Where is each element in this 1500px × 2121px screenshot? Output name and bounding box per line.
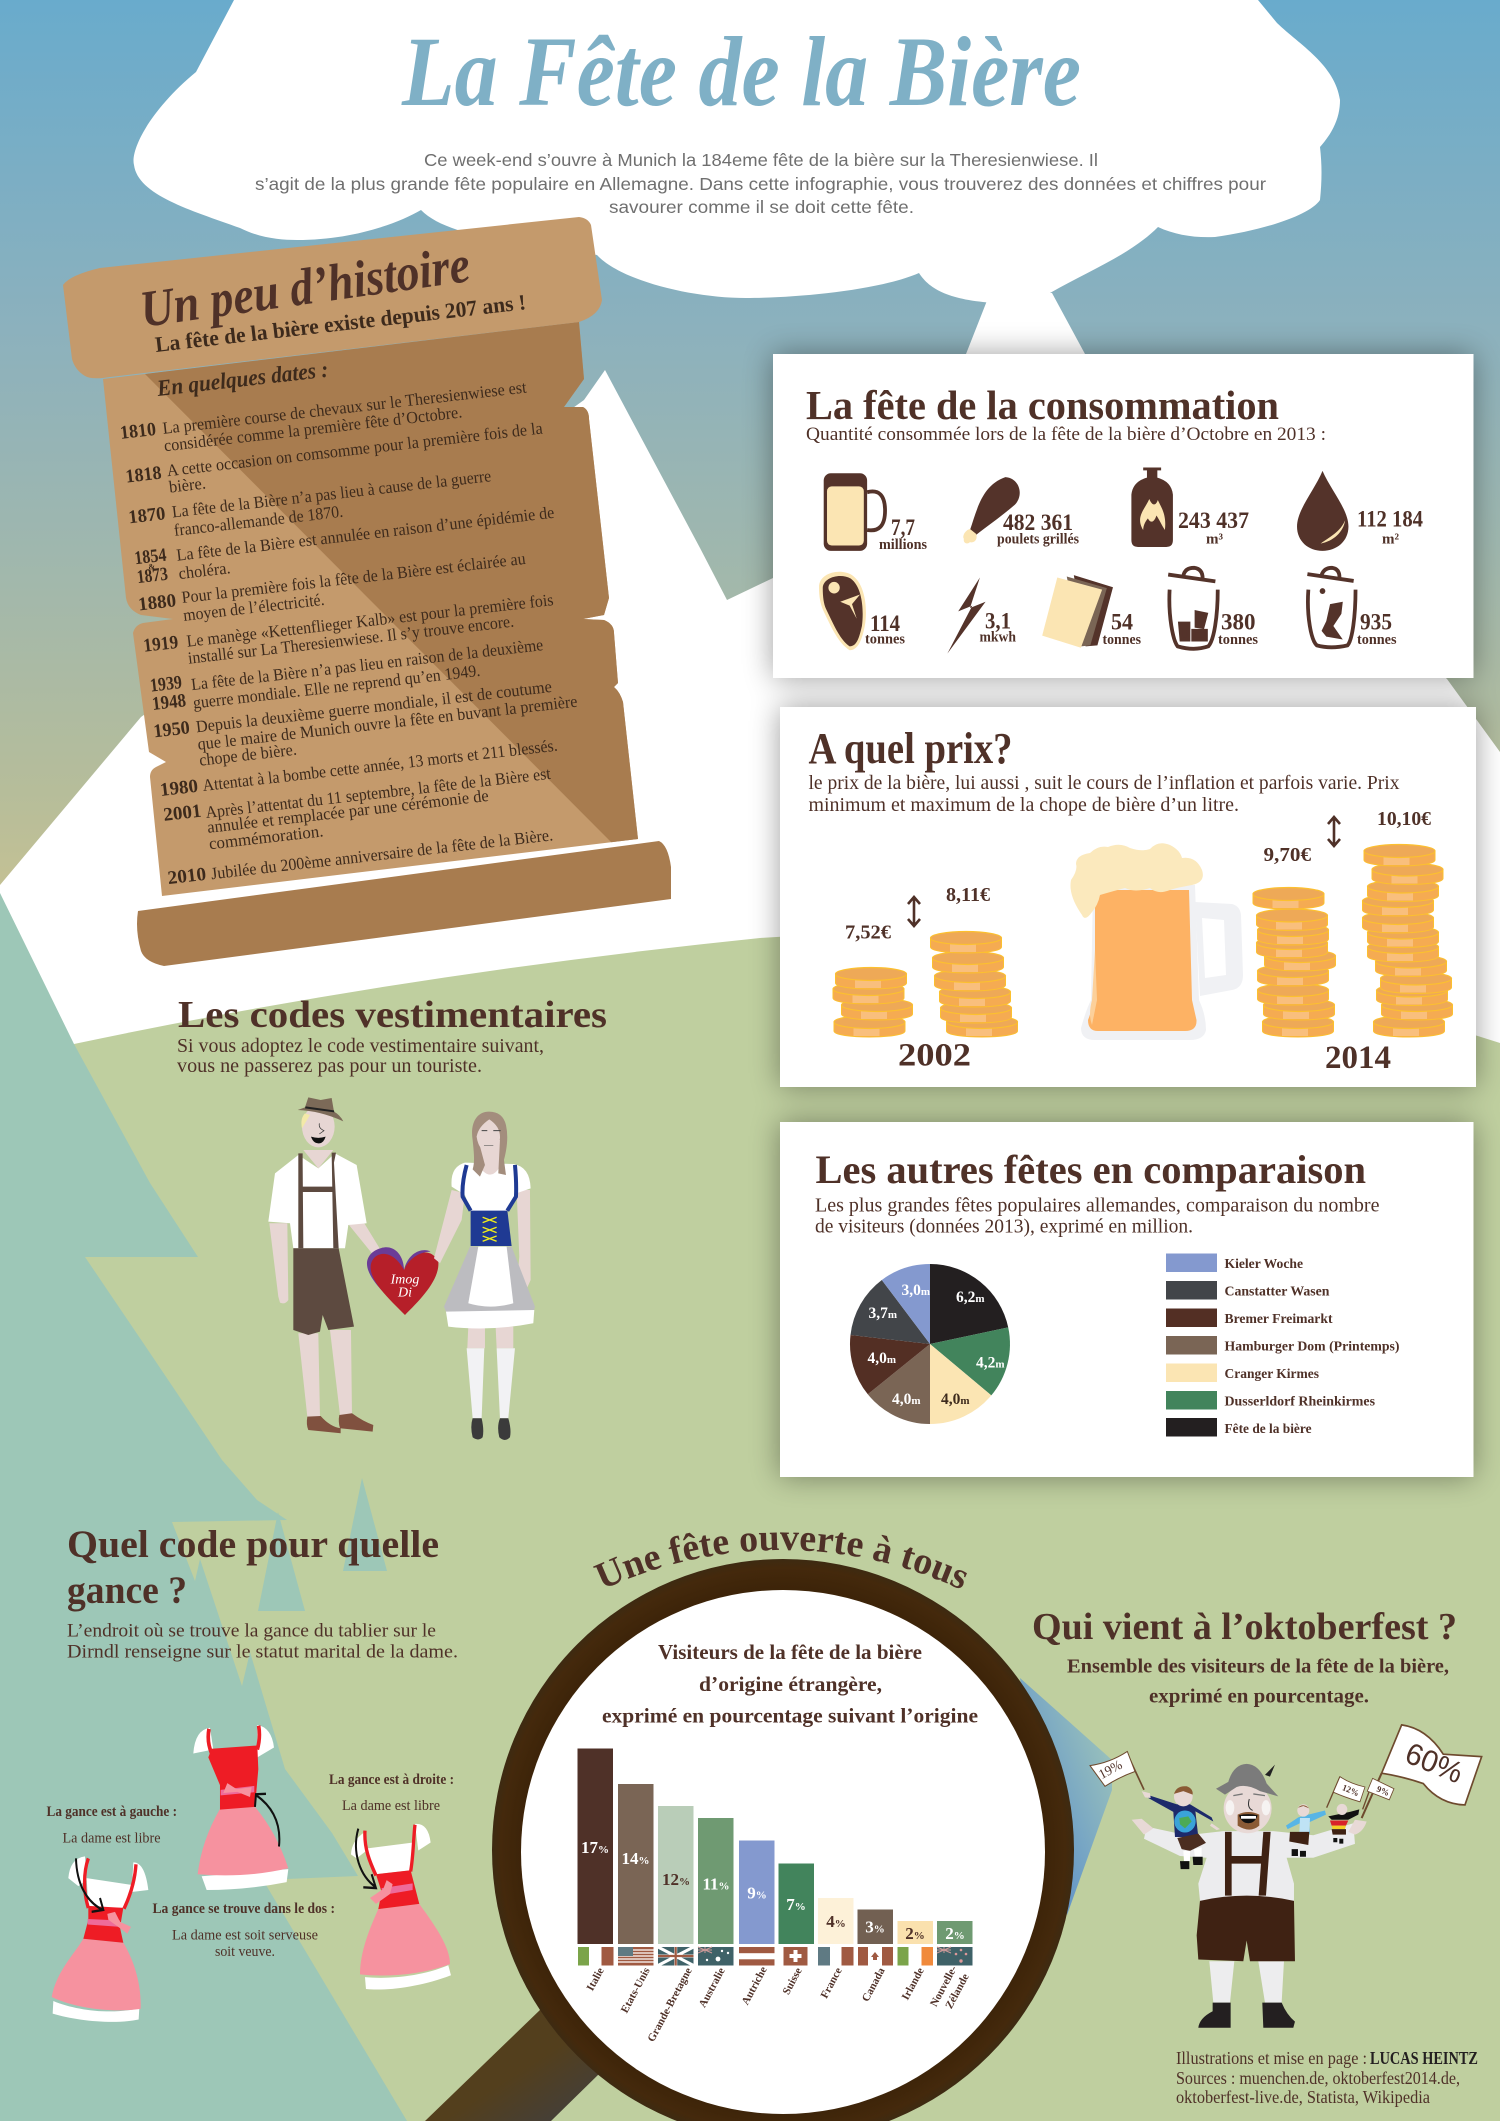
section: magnifier chart [425,1532,1074,2121]
section: apron bow [46,1523,458,2022]
timeline entries: La première course de chevaux sur le Theresienwiese est [162,378,528,438]
callout: left bow [46,1804,177,1846]
country labels: Irlande [900,1966,927,2002]
flag 19% with visitor: 19% [1096,1757,1125,1782]
intro text: s’agit de la plus grande fête populaire en Allemagne. Dans cette infographie, vous trouverez des données et chiffres pour [255,174,1266,194]
description: minimum et maximum de la chope de bière d’un litre. [808,794,1239,816]
dress: right [351,1824,451,1990]
big man illustration [1090,1725,1482,2028]
timeline entries: Le manège «Kettenflieger Kalb» est pour la première fois [186,590,554,651]
legend [1166,1254,1400,1436]
flag 12% with visitor [1286,1777,1365,1857]
background sky [0,0,1500,1100]
consumption icons [819,467,1356,654]
price labels: 7,52€ [845,922,891,944]
consumption figures: 935 [1360,610,1392,634]
heading: A quel prix? [808,724,1012,773]
chart title: Visiteurs de la fête de la bière [658,1640,922,1664]
legend: Dusserldorf Rheinkirmes [1224,1394,1375,1408]
pie chart [850,1264,1010,1424]
man [268,1097,382,1433]
timeline entries: 1980 [159,776,199,801]
consumption figures [865,506,1423,648]
credits: LUCAS HEINTZ [1370,2048,1478,2068]
intro text: Ce week-end s’ouvre à Munich la 184eme fête de la bière sur la Theresienwiese. Il [424,150,1098,170]
heading: La fête de la consommation [806,382,1279,428]
icon: waste bin [1307,568,1356,647]
subheading: La fête de la bière existe depuis 207 ans ! [154,289,527,357]
consumption figures: millions [879,537,927,553]
year labels: 2002 [898,1038,971,1074]
credits [1176,2048,1478,2107]
coin stack 2014 minimum [1253,888,1336,1037]
consumption figures: m² [1382,532,1399,548]
flags [578,1947,972,1966]
consumption figures: 380 [1221,610,1256,634]
consumption figures: 112 184 [1357,506,1423,532]
bar chart [578,1748,972,1944]
country labels: Nouvelle- [928,1963,960,2009]
curved heading: Une fête ouverte à tous [593,1532,967,1588]
timeline entries: 1948 [151,690,187,715]
credits: Illustrations et mise en page : [1176,2048,1367,2068]
bar chart: 14% [622,1849,650,1868]
country labels: Grande-Bretagne [645,1966,695,2044]
timeline entries: & [148,562,156,571]
scroll top roll [63,217,602,378]
country labels: Australie [697,1966,728,2010]
timeline entries: 1870 [127,503,167,528]
icon: food bin [1168,568,1218,649]
pie chart: 4,0m [868,1350,896,1367]
legend: Cranger Kirmes [1224,1366,1319,1381]
flag 9% with visitor [1328,1778,1394,1844]
callout: right bow [329,1772,454,1814]
timeline entries: 2001 [162,801,203,826]
timeline entries: 1919 [142,632,179,657]
timeline entries: 1873 [136,564,169,588]
description [808,772,1400,816]
panel: price [780,707,1476,1087]
timeline entries: chope de bière. [198,740,298,770]
heading: Qui vient à l’oktoberfest ? [1032,1606,1457,1648]
magnifier lens [521,1590,1045,2114]
pie chart: 3,0m [902,1282,930,1299]
callout: back bow: La dame est soit serveuse [172,1928,318,1944]
icon: water drop [1297,471,1348,551]
legend: Canstatter Wasen [1224,1284,1330,1298]
heading: Les autres fêtes en comparaison [816,1147,1366,1192]
timeline entries: bière. [168,474,207,497]
scroll bottom roll [137,841,671,966]
flag 60% [1362,1725,1482,1818]
legend: Fête de la bière [1224,1421,1312,1436]
country labels: Autriche [740,1965,770,2007]
magnifier ring [492,1559,1074,2121]
callout: left bow: La dame est libre [62,1830,160,1846]
pie chart: 4,0m [941,1391,970,1408]
price labels: 8,11€ [946,884,990,906]
description: de visiteurs (données 2013), exprimé en million. [815,1216,1193,1238]
consumption figures: 7,7 [891,515,915,540]
bar chart: 2% [945,1924,965,1943]
timeline entries: moyen de l’électricité. [182,590,325,625]
heading [67,1523,439,1612]
pie chart: 4,0m [892,1391,921,1408]
legend: Bremer Freimarkt [1224,1311,1333,1326]
consumption figures: 114 [870,611,900,636]
timeline entries: guerre mondiale. Elle ne reprend qu’en 1949. [192,661,481,712]
consumption figures: tonnes [1102,632,1141,648]
description: L’endroit où se trouve la gance du tablier sur le [67,1620,436,1642]
timeline entries: La fête de la Bière est annulée en raison d’une épidémie de [176,503,555,565]
description: le prix de la bière, lui aussi , suit le cours de l’inflation et parfois varie. Prix [808,772,1400,794]
icon: paper stack [1042,575,1113,648]
bar chart: 11% [702,1874,730,1894]
price labels: 10,10€ [1377,808,1431,830]
timeline entries: franco-allemande de 1870. [173,502,344,540]
pie chart: 4,2m [976,1354,1005,1372]
country labels: Suisse [781,1966,805,1997]
icon: lightning [947,578,986,654]
scroll body [103,322,638,896]
year labels [898,1038,1391,1076]
heading: Les codes vestimentaires [178,994,607,1036]
card background [780,707,1476,1087]
description [1067,1656,1449,1708]
beer mug illustration [1070,843,1243,1040]
card shadows [773,354,1476,1477]
description: Si vous adoptez le code vestimentaire suivant, [177,1035,544,1057]
magnifier beam [1020,1678,1112,1915]
timeline entries: Depuis la deuxième guerre mondiale, il est de coutume [195,677,553,736]
bar chart: 12% [662,1870,690,1889]
heading: gance ? [67,1569,187,1612]
icon: gas bottle [1131,467,1173,547]
woman [434,1112,535,1440]
timeline entries: 1950 [152,717,191,742]
country labels: Italie [585,1966,607,1993]
timeline entries: 1818 [124,463,163,488]
panel: consumption [773,354,1474,678]
section: dress codes [177,994,607,1440]
consumption figures: 3,1 [985,608,1011,634]
bar chart: 9% [747,1884,767,1902]
flag 9% with visitor: 9% [1375,1784,1391,1798]
country labels: Canada [860,1965,888,2004]
dress: centre [193,1725,288,1890]
timeline entries: que le maire de Munich ouvre la fête en buvant la première [197,692,578,754]
consumption figures: mkwh [980,630,1017,646]
timeline entries: A cette occasion on comsomme pour la première fois de la [166,418,544,480]
arrow: 2002 range [908,897,920,926]
subheading: dates: En quelques dates : [155,357,329,401]
heading: Quel code pour quelle [67,1523,439,1566]
country labels: Zélande [943,1972,972,2011]
description: Ensemble des visiteurs de la fête de la bière, [1067,1656,1449,1678]
background green hill [0,934,1500,2121]
consumption figures: tonnes [1218,632,1258,648]
timeline entries: 1939 [149,672,183,697]
description: Les plus grandes fêtes populaires allemandes, comparaison du nombre [815,1194,1380,1216]
callout: right bow: La dame est libre [342,1798,440,1814]
credits: Sources : muenchen.de, oktoberfest2014.de, [1176,2068,1460,2088]
timeline entries: considérée comme la première fête d’Octobre. [163,402,463,455]
timeline entries: La fête de la Bière n’a pas lieu en raison de la deuxième [190,635,544,694]
heart: Imog [390,1272,419,1287]
consumption figures: 482 361 [1003,510,1073,535]
consumption figures: tonnes [865,632,905,648]
bar chart: 4% [826,1912,846,1931]
callout: left bow: La gance est à gauche : [46,1804,177,1820]
coin stack 2002 maximum [930,932,1018,1037]
legend: Kieler Woche [1224,1256,1303,1271]
callout: back bow: La gance se trouve dans le dos : [152,1901,335,1917]
heart: Di [397,1286,412,1301]
chart title [602,1640,978,1728]
description: exprimé en pourcentage. [1149,1686,1369,1708]
year labels: 2014 [1325,1040,1391,1076]
section: who comes [1032,1606,1482,2107]
timeline entries: 1854 [133,545,168,569]
timeline entries: Après l’attentat du 11 septembre, la fête de la Bière est [205,764,552,822]
background teal mountains [0,893,407,2121]
flag 60%: 60% [1401,1737,1467,1790]
consumption figures: 54 [1111,610,1133,634]
price labels [845,808,1431,944]
description: vous ne passerez pas pour un touriste. [177,1055,482,1077]
consumption figures: 243 437 [1178,508,1249,533]
legend: Hamburger Dom (Printemps) [1224,1338,1400,1354]
dress: left [52,1856,148,2022]
timeline entries: Jubilée du 200ème anniversaire de la fête de la Bière. [210,825,554,883]
description: Dirndl renseigne sur le statut marital de la dame. [67,1642,458,1662]
big man [1132,1764,1367,2028]
title: La Fête de la Bière [401,16,1081,127]
timeline entries: 2010 [167,864,207,889]
timeline entries: La fête de la Bière n’a pas lieu à cause de la guerre [171,466,492,521]
subheading: Quantité consommée lors de la fête de la bière d’Octobre en 2013 : [806,424,1326,445]
description [67,1620,458,1662]
icon: beer mug [824,473,885,551]
description [177,1035,544,1077]
background white mountains [0,293,1500,1100]
heart [367,1247,438,1315]
country labels: France [819,1966,845,2001]
timeline entries [119,378,578,889]
bar chart: 3% [865,1918,885,1936]
cloud [134,0,1340,303]
chart title: exprimé en pourcentage suivant l’origine [602,1704,978,1728]
callout: back bow: soit veuve. [215,1944,275,1960]
dresses [52,1725,451,2022]
flag 19% with visitor [1090,1751,1220,1869]
flag 12% with visitor: 12% [1341,1782,1361,1798]
timeline entries: Attentat à la bombe cette année, 13 morts et 211 blessés. [202,736,558,795]
country labels: Etats-Unis [619,1965,653,2015]
timeline entries: commémoration. [208,821,324,853]
consumption figures: poulets grillés [997,532,1079,548]
icon: steak [819,572,866,650]
country labels [585,1963,972,2044]
consumption figures: tonnes [1357,632,1397,648]
pie chart: 3,7m [868,1305,897,1322]
arrow: 2014 range [1328,817,1340,846]
timeline entries: annulée et remplacée par une cérémonie de [206,786,490,837]
intro text [255,150,1266,217]
couple illustration [268,1097,535,1440]
timeline entries: 1810 [119,419,157,444]
coin stack 2002 minimum [833,968,912,1037]
timeline entries: choléra. [178,558,231,583]
timeline entries: Pour la première fois la fête de la Bière est éclairée au [181,549,527,607]
heading: un peu d'histoire: Un peu d’histoire [137,236,473,339]
timeline entries: installé sur La Theresienwiese. Il s’y trouve encore. [187,612,515,668]
panel: other festivals [780,1122,1474,1477]
intro text: savourer comme il se doit cette fête. [609,197,914,217]
price labels: 9,70€ [1264,844,1311,866]
card background [773,354,1474,678]
callout: back bow [152,1901,335,1960]
magnifier handle [425,2009,601,2121]
pie chart: 6,2m [956,1289,985,1306]
bar chart: 17% [581,1838,609,1857]
bar chart: 2% [905,1924,925,1943]
icon: chicken leg [963,477,1020,543]
timeline entries: 1880 [137,590,177,615]
bar chart: 7% [786,1895,806,1914]
credits: oktoberfest-live.de, Statista, Wikipedia [1176,2087,1430,2107]
coin stack 2014 maximum [1362,844,1452,1037]
chart title: d’origine étrangère, [699,1672,882,1696]
card background [780,1122,1474,1477]
callout: right bow: La gance est à droite : [329,1772,454,1788]
consumption figures: m³ [1206,532,1223,548]
panel: history scroll [63,217,671,966]
description [815,1194,1380,1238]
